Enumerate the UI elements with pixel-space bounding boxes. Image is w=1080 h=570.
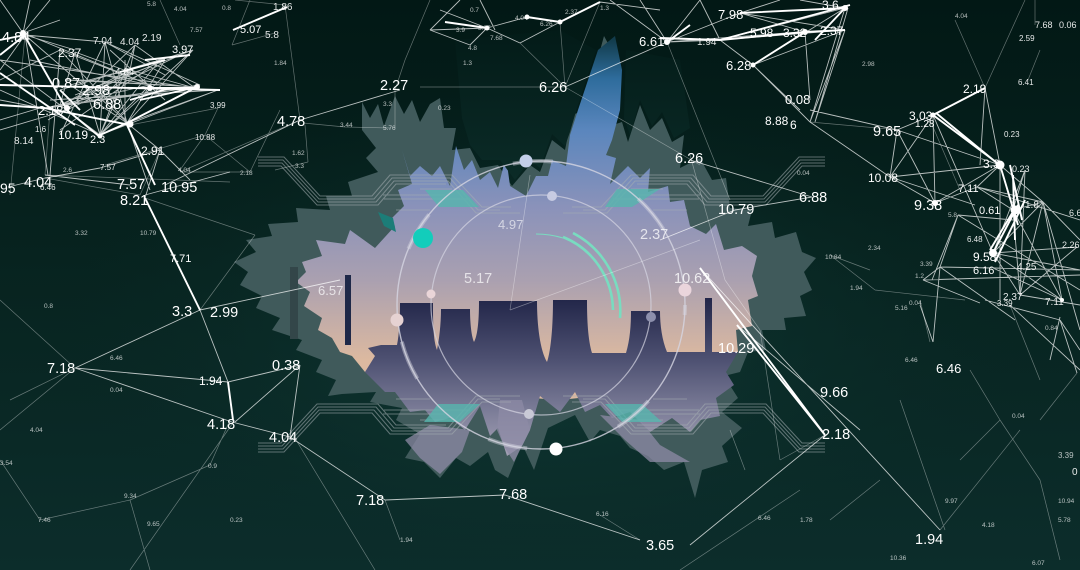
- scattered small labels, lower field: 3.54: [0, 460, 13, 467]
- network labels, top left cluster: 1.84: [274, 60, 287, 67]
- network labels, right cluster: 1.8: [1025, 200, 1039, 211]
- network labels, right cluster: [797, 82, 1080, 332]
- network labels, top left cluster: 4.84: [2, 30, 30, 46]
- network labels, top left cluster: 5.07: [240, 24, 261, 36]
- network labels, top left cluster: 7.57: [190, 27, 203, 34]
- network labels, top left cluster: 2.18: [38, 103, 63, 118]
- network labels, top left cluster: 2.98: [82, 83, 110, 99]
- scattered small labels, lower field: 1.94: [400, 537, 413, 544]
- network labels, top right cluster: 1.94: [697, 37, 717, 48]
- network labels, right cluster: 1.94: [850, 285, 863, 292]
- large number labels: 9.66: [820, 385, 848, 401]
- network labels, top center cluster: 1.62: [292, 150, 305, 157]
- network labels, right cluster: 4.25: [1017, 262, 1037, 273]
- scattered small labels, lower field: 9.34: [124, 493, 137, 500]
- network labels, top right cluster: 7.68: [1035, 20, 1053, 30]
- network labels, right cluster: 2.34: [868, 245, 881, 252]
- network labels, right cluster: 9.38: [914, 198, 942, 214]
- network labels, top center cluster: 3.97: [478, 25, 491, 32]
- network node clusters: [20, 5, 1064, 302]
- network labels, top center cluster: 6.26: [540, 21, 553, 28]
- scattered small labels, lower field: 0.04: [1012, 413, 1025, 420]
- network labels, top left cluster: 1.6: [35, 125, 47, 134]
- network labels, top center cluster: 3.44: [340, 122, 353, 129]
- large number labels: 4.78: [277, 114, 305, 130]
- teal leaf accent: [378, 212, 396, 232]
- circuit traces, top left: [258, 157, 520, 213]
- network labels, top left cluster: 0.8: [222, 5, 231, 12]
- network labels, top left cluster: 95: [0, 180, 16, 196]
- scattered small labels, lower field: 3.39: [1058, 451, 1074, 460]
- circuit traces, bottom left: [258, 396, 520, 452]
- large number labels: 2.37: [640, 227, 668, 243]
- network labels, right cluster: 3.03: [909, 109, 933, 123]
- network labels, top right cluster: 4.04: [955, 13, 968, 20]
- network labels, top center cluster: 0.7: [470, 7, 479, 14]
- network labels, right cluster: 3.39: [920, 261, 933, 268]
- network labels, top left cluster: 6.46: [40, 183, 56, 192]
- network labels, top left cluster: 7.04: [93, 36, 113, 47]
- large number labels: 1.94: [199, 374, 223, 388]
- large number labels: 2.18: [822, 427, 850, 443]
- left chimneys: [290, 267, 351, 345]
- network labels, top center cluster: 3.3: [383, 101, 392, 108]
- scattered small labels, lower field: 5.78: [1058, 517, 1071, 524]
- network: thick links: [0, 2, 1025, 435]
- network labels, right cluster: 7.11: [1045, 297, 1064, 308]
- network labels, top right cluster: 7.98: [718, 7, 743, 22]
- scattered small labels, lower field: 7.46: [38, 517, 51, 524]
- large number labels: 2.99: [210, 305, 238, 321]
- network labels, top left cluster: 3.99: [210, 101, 226, 110]
- network labels, top left cluster: 2.19: [142, 33, 162, 44]
- network labels, top left cluster: 0.87: [52, 76, 80, 92]
- network labels, top right cluster: 6.28: [726, 58, 751, 73]
- network labels, right cluster: 3.39: [997, 299, 1013, 308]
- network labels, top left cluster: 2.18: [240, 170, 253, 177]
- network labels, right cluster: 0.84: [1045, 325, 1058, 332]
- large number labels: [47, 78, 961, 554]
- network labels, top left cluster: 2.91: [141, 144, 165, 158]
- network labels, right cluster: 2.26: [1062, 240, 1080, 250]
- network labels, right cluster: 2.37: [1003, 292, 1023, 303]
- large number labels: 7.68: [499, 487, 527, 503]
- network labels, top right cluster: 2.98: [862, 61, 875, 68]
- network labels, right cluster: 3.3: [983, 157, 1000, 171]
- network labels, top center cluster: 5.76: [383, 125, 396, 132]
- network labels, top center cluster: 2.37: [565, 9, 578, 16]
- large number labels: 3.65: [646, 538, 674, 554]
- large number labels: 7.18: [356, 493, 384, 509]
- scattered small labels, lower field: 0.04: [110, 387, 123, 394]
- network labels, right cluster: 9.65: [873, 124, 901, 140]
- network labels, top left cluster: 2.3: [90, 134, 105, 146]
- network labels, top left cluster: 5.8: [147, 1, 156, 8]
- network labels, top left cluster: 3.97: [172, 44, 193, 56]
- large number labels: 6.57: [318, 283, 343, 298]
- network labels, top left cluster: 10.88: [195, 133, 216, 142]
- network labels, top left cluster: 4.04: [120, 37, 140, 48]
- scattered small labels, lower field: 0.8: [44, 303, 53, 310]
- network labels, top left cluster: 5.8: [265, 30, 279, 41]
- network labels, right cluster: 9.58: [973, 250, 997, 264]
- large number labels: 4.18: [207, 417, 235, 433]
- scattered small labels, lower field: 10.94: [1058, 498, 1075, 505]
- network labels, right cluster: 1.28: [915, 119, 935, 130]
- outer jagged foliage silhouette: [234, 36, 816, 498]
- network labels, top right cluster: 2.37: [820, 24, 844, 38]
- network labels, top center cluster: 4.8: [468, 45, 477, 52]
- large number labels: 6.46: [936, 361, 961, 376]
- scattered small labels, lower field: 4.18: [982, 522, 995, 529]
- network labels, top center cluster: 1.3: [463, 60, 472, 67]
- scattered small labels, lower field: 0.9: [208, 463, 217, 470]
- network labels, top right cluster: 3.32: [783, 26, 807, 40]
- large number labels: 6.26: [675, 151, 703, 167]
- scattered small labels, lower field: 1.78: [800, 517, 813, 524]
- cooling towers and plant silhouette: [365, 298, 738, 456]
- network labels, right cluster: 10.08: [868, 171, 898, 185]
- network labels, top center cluster: 3.3: [295, 163, 304, 170]
- network labels, right cluster: 0.23: [1012, 164, 1030, 174]
- network labels, top right cluster: 0.06: [1059, 20, 1077, 30]
- network labels, right cluster: 0.04: [797, 170, 810, 177]
- network labels, top right cluster: 6.41: [1018, 78, 1034, 87]
- large number labels: 2.27: [380, 78, 408, 94]
- network labels, right cluster: 1.2: [915, 273, 924, 280]
- network labels, right cluster: 0.04: [909, 300, 922, 307]
- network labels, right cluster: 0.23: [1004, 130, 1020, 139]
- network labels, right cluster: 0.61: [979, 205, 1000, 217]
- large number labels: 1.94: [915, 532, 943, 548]
- network labels, top right cluster: 2.59: [1019, 34, 1035, 43]
- network labels, top left cluster: 2.6: [63, 167, 72, 174]
- large number labels: 10.62: [674, 271, 710, 287]
- network labels, top center cluster: 10.79: [140, 230, 157, 237]
- network labels, top center cluster: [75, 5, 609, 237]
- network labels, top right cluster: 8.88: [765, 114, 789, 128]
- dark foliage patches: [455, 30, 690, 180]
- network labels, top left cluster: 6.88: [93, 97, 121, 113]
- teal parallelograms: [424, 189, 662, 422]
- network labels, right cluster: 6.16: [973, 265, 994, 277]
- network labels, top right cluster: 0.08: [785, 92, 810, 107]
- network labels, top left cluster: 8.14: [14, 136, 34, 147]
- scattered small labels, lower field: 6.46: [758, 515, 771, 522]
- HUD ring nodes: [390, 154, 692, 456]
- network labels, right cluster: 10.84: [825, 254, 842, 261]
- network labels, top left cluster: 10.95: [161, 180, 197, 196]
- large number labels: 4.97: [498, 217, 523, 232]
- network labels, top center cluster: 1.3: [600, 5, 609, 12]
- scattered small labels, lower field: 0.23: [230, 517, 243, 524]
- dusk sky window: [296, 36, 758, 400]
- network labels, top left cluster: 2.37: [58, 46, 82, 60]
- large number labels: 10.29: [718, 341, 754, 357]
- network labels, top center cluster: 7.68: [490, 35, 503, 42]
- network labels, top left cluster: 10.19: [58, 128, 88, 142]
- network labels, top right cluster: 6: [790, 118, 797, 132]
- network labels, top left cluster: 1.86: [273, 2, 293, 13]
- network labels, right cluster: 5.8: [948, 212, 957, 219]
- network labels, top right cluster: 5.98: [750, 26, 774, 40]
- large number labels: 10.79: [718, 202, 754, 218]
- scattered small labels, lower field: 6.46: [905, 357, 918, 364]
- circuit traces, bottom right: [563, 396, 825, 452]
- network labels, right cluster: 6.48: [967, 235, 983, 244]
- scattered small labels, lower field: [0, 303, 1078, 567]
- network labels, top center cluster: 3.9: [456, 27, 465, 34]
- large number labels: 4.04: [269, 430, 297, 446]
- network labels, top right cluster: 6.61: [639, 34, 664, 49]
- scattered small labels, lower field: 0: [1072, 467, 1078, 478]
- circuit traces, top right: [563, 157, 825, 213]
- network labels, top left cluster: 4.04: [24, 175, 52, 191]
- large number labels: 0.38: [272, 358, 300, 374]
- network labels, top center cluster: 0.23: [438, 105, 451, 112]
- scattered small labels, lower field: 4.04: [30, 427, 43, 434]
- large number labels: 6.26: [539, 80, 567, 96]
- network labels, top left cluster: 7.57: [117, 177, 145, 193]
- network labels, top left cluster: 4.84: [115, 67, 135, 78]
- HUD rings: [397, 161, 685, 449]
- large number labels: 3.3: [172, 304, 192, 320]
- network labels, top center cluster: 3.32: [75, 230, 88, 237]
- network labels, right cluster: 2.19: [963, 82, 987, 96]
- large number labels: 7.18: [47, 361, 75, 377]
- network labels, top center cluster: 4.04: [515, 15, 528, 22]
- network labels, right cluster: 5.16: [895, 305, 908, 312]
- lower lavender spikes: [405, 400, 690, 474]
- scattered small labels, lower field: 9.65: [147, 521, 160, 528]
- network labels, top left cluster: 4.04: [178, 167, 191, 174]
- network labels, right cluster: 7.11: [958, 183, 979, 195]
- network labels, top left cluster: 7.57: [100, 163, 116, 172]
- scattered small labels, lower field: 10.36: [890, 555, 907, 562]
- large number labels: 6.88: [799, 190, 827, 206]
- network labels, top right cluster: [639, 0, 1077, 132]
- scattered small labels, lower field: 6.16: [596, 511, 609, 518]
- scattered small labels, lower field: 6.07: [1032, 560, 1045, 567]
- network labels, top left cluster: 8.21: [120, 193, 148, 209]
- scattered small labels, lower field: 9.97: [945, 498, 958, 505]
- teal gauge arcs: [536, 233, 620, 318]
- scattered small labels, lower field: 6.46: [110, 355, 123, 362]
- large number labels: 5.17: [464, 271, 492, 287]
- network labels, top left cluster: 4.04: [174, 6, 187, 13]
- network labels, top left cluster: [0, 1, 293, 209]
- large number labels: 7.71: [170, 253, 191, 265]
